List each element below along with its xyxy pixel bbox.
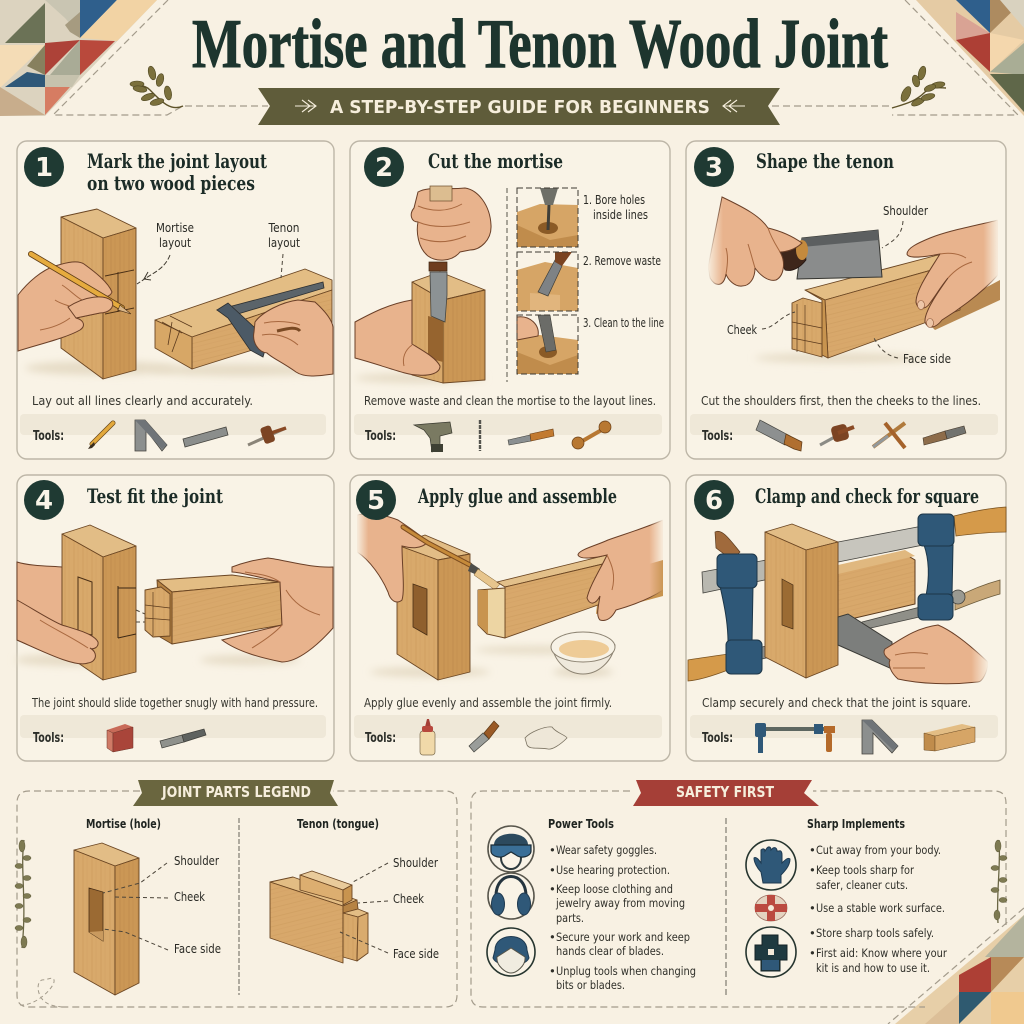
quilt corner: top left (0, 0, 157, 116)
illustration: tenon piece with glue and hand (475, 520, 663, 654)
callout: face side: Face side (903, 352, 951, 366)
labels: mortise parts: Cheek (174, 890, 205, 904)
list: power tools: Unplug tools when changing (556, 964, 696, 978)
labels: mortise sub-steps: 1. Bore holes (583, 193, 645, 207)
list: power tools: Secure your work and keep (556, 930, 690, 944)
list: sharp implements: • (809, 901, 816, 915)
inset: remove waste (517, 252, 578, 311)
callout: mortise layout: layout (159, 236, 191, 250)
list: sharp implements: • (809, 843, 816, 857)
illustration: mortised block with brush (357, 514, 500, 680)
list: power tools: Keep loose clothing and (556, 882, 673, 896)
list: sharp implements: safer, cleaner cuts. (816, 878, 908, 892)
heading step 1: Mark the joint layout (87, 149, 268, 173)
tool: marking gauge (820, 423, 854, 445)
illustration: glue bowl (551, 632, 615, 676)
divider (238, 818, 240, 995)
callout: mortise layout: Mortise (156, 221, 194, 235)
tool: chisel (508, 429, 554, 445)
step number 5: 5 (367, 486, 385, 516)
illustration: hand gripping chisel (411, 186, 491, 260)
list: sharp implements: • (809, 946, 816, 960)
step number 2 (364, 147, 404, 187)
heading step 2: Cut the mortise (428, 149, 563, 173)
step number 3 (694, 147, 734, 187)
heading: sharp implements: Sharp Implements (807, 816, 905, 831)
icon: dust mask (487, 928, 535, 976)
decorative loop (20, 978, 62, 1007)
tool: sharpening stone (923, 426, 966, 445)
divider (725, 818, 727, 995)
list: power tools: parts. (556, 911, 584, 925)
panel: safety first (471, 780, 1007, 1007)
icon: first aid (755, 895, 787, 921)
illustration: mortised block with hand (15, 525, 145, 680)
tools row step 4 (20, 715, 326, 752)
tool: marking knife (183, 427, 228, 447)
list: power tools: • (549, 930, 556, 944)
legend: mortise heading: Mortise (hole) (86, 816, 161, 831)
caption step 4: The joint should slide together snugly with hand pressure. (31, 696, 318, 710)
callout: tenon layout: Tenon (268, 221, 300, 235)
tool: try square (862, 720, 898, 754)
step number 4: 4 (35, 486, 53, 516)
step number 2: 2 (375, 153, 393, 183)
illustration: block with chisel (355, 262, 485, 383)
callout: cheek (727, 312, 795, 337)
list: power tools: • (549, 964, 556, 978)
callout: mortise layout (137, 221, 194, 284)
labels: tenon parts (340, 856, 439, 961)
list: power tools: jewelry away from moving (555, 896, 685, 910)
tools row step 3: Tools: (702, 429, 733, 444)
panel: step 3 (686, 141, 1006, 459)
caption step 1: Lay out all lines clearly and accurately. (32, 394, 253, 408)
panel: step 4 (15, 475, 334, 761)
labels: mortise parts (103, 854, 221, 956)
illustration: board with square and hand (150, 269, 333, 376)
diagram: mortise block (74, 843, 139, 995)
icon: cut-resistant glove (746, 927, 796, 977)
icon: safety goggles (488, 826, 534, 872)
panel: step 2 (350, 141, 670, 459)
panel: step 1 (17, 141, 334, 459)
list: power tools: hands clear of blades. (556, 944, 664, 958)
quilt corner: top right (916, 0, 1024, 116)
tools row step 6 (690, 715, 998, 754)
tools row step 3 (690, 414, 998, 451)
caption step 5: Apply glue evenly and assemble the joint firmly. (364, 696, 612, 710)
tool: rasp (160, 729, 206, 748)
tool: tenon saw (756, 420, 802, 451)
list: power tools: Wear safety goggles. (556, 843, 657, 857)
labels: tenon parts: Cheek (393, 892, 424, 906)
caption step 2: Remove waste and clean the mortise to the layout lines. (364, 394, 656, 408)
list: power tools: Use hearing protection. (556, 863, 670, 877)
heading: power tools: Power Tools (548, 816, 614, 831)
banner: legend: JOINT PARTS LEGEND (161, 783, 311, 801)
panel: step 5 (350, 475, 670, 761)
list: sharp implements: Use a stable work surface. (816, 901, 945, 915)
tool: chisels crossed (873, 423, 905, 448)
step number 6 (694, 480, 734, 520)
illustration: hand with pencil (18, 254, 131, 351)
list: power tools: bits or blades. (556, 978, 625, 992)
tool: wood block (924, 724, 975, 751)
step number 1: 1 (35, 153, 53, 183)
banner: safety: SAFETY FIRST (676, 783, 775, 801)
tool: chisel (469, 721, 499, 752)
tools row step 5 (354, 715, 662, 755)
tool: drill (414, 422, 452, 452)
subtitle banner (258, 88, 780, 125)
labels: tenon parts: Shoulder (393, 856, 438, 870)
callout: face side (874, 338, 951, 366)
illustration: upright block with layout lines (25, 209, 175, 379)
caption step 3: Cut the shoulders first, then the cheeks to the lines. (701, 394, 981, 408)
step number 1 (24, 147, 64, 187)
tool: glue bottle (420, 719, 435, 755)
labels: mortise sub-steps: 2. Remove waste (583, 254, 661, 268)
list: sharp implements: • (809, 863, 816, 877)
tool: try square (135, 420, 167, 451)
tools row step 4: Tools: (33, 731, 64, 746)
illustration: square and hand (838, 614, 988, 684)
callout: tenon layout: layout (268, 236, 300, 250)
tool: pencil (88, 423, 113, 449)
callout: shoulder (882, 204, 928, 248)
caption step 6: Clamp securely and check that the joint is square. (702, 696, 971, 710)
illustration: tenon board (755, 255, 1000, 363)
step number 5 (356, 480, 396, 520)
labels: mortise sub-steps: 3. Clean to the line (583, 316, 664, 330)
banner: safety (633, 780, 819, 806)
list: sharp implements: • (809, 926, 816, 940)
illustration: supporting hand (355, 300, 440, 375)
tool: drill bit (479, 420, 481, 451)
list: sharp implements (809, 843, 947, 975)
inset: bore holes (517, 188, 578, 247)
labels: mortise sub-steps: inside lines (593, 208, 648, 222)
tool: bar clamp (755, 723, 835, 753)
diagram: tenon block (270, 871, 368, 963)
inset: clean to the line (517, 315, 578, 374)
labels: mortise parts: Face side (174, 942, 221, 956)
callout: tenon layout (268, 221, 300, 278)
icon: right vine (991, 840, 1007, 923)
tool: glue block (107, 724, 133, 752)
step number 3: 3 (705, 153, 723, 183)
tools row step 2: Tools: (365, 429, 396, 444)
icon: ear protection (488, 873, 534, 919)
list: sharp implements: kit is and how to use it. (816, 961, 930, 975)
tools row step 5: Tools: (365, 731, 396, 746)
quilt corner: bottom right (895, 915, 1024, 1024)
heading step 3: Shape the tenon (756, 149, 894, 173)
divider (506, 188, 508, 382)
list: sharp implements: Cut away from your body. (816, 843, 941, 857)
banner: legend (133, 780, 338, 806)
icon: work glove (746, 840, 796, 890)
icon: left sprig (130, 65, 183, 108)
icon: left vine (15, 840, 31, 948)
subtitle banner: A STEP-BY-STEP GUIDE FOR BEGINNERS (330, 97, 710, 118)
tool: marking gauge (248, 425, 286, 445)
step number 4 (24, 480, 64, 520)
list: power tools: • (549, 863, 556, 877)
callout: shoulder: Shoulder (883, 204, 928, 218)
heading step 1: on two wood pieces (87, 171, 255, 195)
heading step 1 (87, 149, 268, 195)
list: sharp implements: Keep tools sharp for (816, 863, 914, 877)
step number 6: 6 (705, 486, 723, 516)
illustration: saw and gripping hand (708, 197, 882, 286)
tools row step 1 (20, 414, 326, 451)
tools row step 2 (354, 414, 662, 452)
tools row step 1: Tools: (33, 429, 64, 444)
labels: mortise sub-steps (583, 193, 664, 330)
callout: cheek: Cheek (727, 323, 757, 337)
tool: cloth rag (525, 727, 567, 749)
list: sharp implements: First aid: Know where your (816, 946, 947, 960)
list: sharp implements: Store sharp tools safely. (816, 926, 934, 940)
list: power tools: • (549, 843, 556, 857)
heading step 4: Test fit the joint (87, 484, 224, 508)
labels: tenon parts: Face side (393, 947, 439, 961)
legend: tenon heading: Tenon (tongue) (297, 816, 379, 831)
illustration: holding hand (907, 220, 998, 328)
panel: step 6 (686, 475, 1006, 761)
labels: mortise parts: Shoulder (174, 854, 219, 868)
icon: right sprig (892, 65, 946, 108)
tools row step 6: Tools: (702, 731, 733, 746)
illustration: tenon piece with hand (145, 558, 333, 665)
panel: joint parts legend (15, 780, 457, 1007)
list: power tools (549, 843, 696, 992)
list: power tools: • (549, 882, 556, 896)
illustration: clamps and joint (688, 507, 1006, 681)
heading step 5: Apply glue and assemble (417, 484, 617, 508)
tool: mallet (572, 421, 611, 449)
